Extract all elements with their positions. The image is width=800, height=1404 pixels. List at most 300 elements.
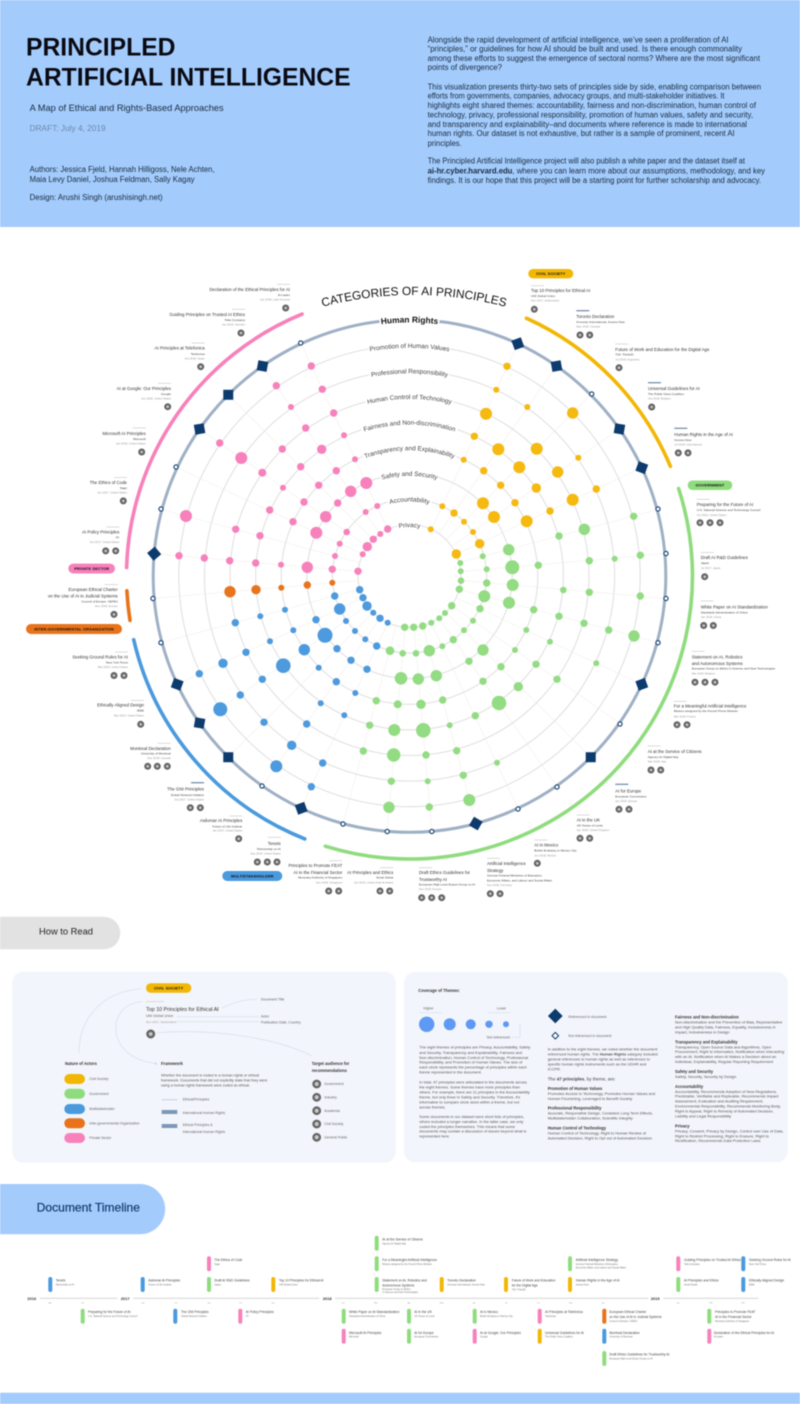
callouts: Publication Date, Country [261,1020,301,1024]
entry: Human Rights in the Age of AI [568,1277,620,1292]
actor arc: civil society [526,318,670,466]
document: Universal Guidelines for AI: Oct 2018, Belgium [648,397,672,401]
document: Guiding Principles on Trusted AI Ethics: Telia Company [225,318,245,322]
entry: AI for Europe [407,1329,439,1344]
document: AI at Google: Our Principles: Google [161,392,171,396]
document: Artificial Intelligence Strategy: Artificial Intelligence [487,861,526,866]
document: European Ethical Charter: on the Use of AI in Judicial Systems [48,594,119,598]
entry: AI at the Service of Citizens [375,1236,423,1251]
entry: Guiding Principles: Guiding Principles on Trusted AI Ethics [684,1258,741,1262]
document: AI Policy Principles [82,527,120,553]
entry: Top 10 Principles: UNI Global Union [279,1284,298,1286]
document: Statement on AI, Robotics and Autonomous Systems: Statement on AI, Robotics [692,654,743,659]
example document: CIVIL SOCIETY [154,986,184,990]
middle column text: referenced human rights. The Human Rights category included [548,1052,658,1057]
entry: AI Principles at Telefonica [538,1309,583,1324]
document: Statement on AI, Robotics and Autonomous Systems: European Group on Ethics in Science and New Technologies [692,667,776,671]
document: Future of Work and Education for the Digital Age [615,344,710,370]
document: White Paper on AI Standardization: White Paper on AI Standardization [701,604,768,609]
document: AI in the UK [577,815,610,841]
legend: framework: Ethical/Principles [183,1098,210,1102]
entry: AI in the UK: AI in the UK [414,1310,433,1314]
intro text: principles. [428,139,462,148]
callouts: Actor [261,1014,270,1018]
right column text: Procurement, Right to Information, Notification when interacting [675,1049,784,1054]
explanatory text: theme represented in the document. [419,1070,482,1075]
footer band [0,1393,800,1404]
document: Tenets: Tenets [268,841,282,846]
entry: Guiding Principles: Telia Company [684,1263,701,1266]
authors and design credit: Authors: Jessica Fjeld, Hannah Hilligoss, Nele Achten, [30,165,215,174]
document: Tenets: Partnership on AI [257,847,281,851]
document: Top 10 Principles for Ethical AI [531,286,590,312]
dots: inter-governmental [224,580,335,597]
callouts [261,998,301,1024]
ring labels [363,316,456,530]
axis: 2016 [27,1296,37,1301]
document: Top 10 Principles for Ethical AI: Dec 2017, Switzerland [531,299,559,303]
document: AI at Google: Our Principles: AI at Google: Our Principles [117,386,172,391]
document: The Ethics of Code: The Ethics of Code [90,480,128,485]
entry: The Ethics of Code: Sage [214,1263,221,1266]
document: Artificial Intelligence Strategy: German Federal Ministries of Education, [487,873,543,877]
entry: Artificial Intelligence Strategy: German Federal Ministries of Education, [576,1263,619,1266]
axis: May [440,1302,444,1304]
entry: Montreal Declaration [602,1329,640,1344]
ring labels: Promotion of Human Values [369,342,450,352]
document: Future of Work and Education for the Digital Age: Future of Work and Education for the Digital Age [615,347,710,352]
legend: framework: framework. Documents that did not explicitly state that they were [161,1077,267,1082]
entry: The GNI Principles: Global Network Initiative [181,1315,207,1318]
axis: Oct [239,1302,243,1304]
entry: Guiding Principles [676,1256,741,1271]
intro text [428,35,765,185]
entry: Universal Guidelines for AI: The Public Voice Coalition [545,1335,573,1338]
legend: target audience: Civil Society [324,1122,344,1126]
right column text: with an AI, Notification when AI Makes a Decision about an [675,1054,776,1059]
explanatory text: informative to compare circle sizes within a theme, but not [419,1099,520,1104]
human rights ring [153,320,666,832]
axis: Sep [48,1302,53,1304]
document: AI Principles at Telefonica: Oct 2018, Spain [185,356,205,360]
document: AI Principles at Telefonica: AI Principles at Telefonica [154,346,205,350]
entry: Statement on AI: Autonomous Systems [382,1284,415,1288]
legend: nature of actors: Nature of Actors [65,1061,98,1066]
document: AI for Europe [615,784,647,812]
entry: Universal Guidelines for AI [538,1329,584,1344]
subtitle: A Map of Ethical and Rights-Based Approaches [30,102,224,113]
entry: European Ethical Charter: Council of Europe: CEPEJ [609,1320,638,1323]
legend: framework [155,1061,267,1134]
middle column text: Human Flourishing, Leveraged to Benefit Society [548,1096,632,1101]
document: AI in Mexico: AI in Mexico [534,842,559,848]
middle column text: Human Control of Technology [548,1126,607,1131]
axis: 2019 [651,1296,660,1301]
document: Principles to Promote FEAT AI in the Financial Sector: Monetary Authority of Singapore [298,876,343,880]
document: The Ethics of Code: Sage [120,486,127,490]
document: Guiding Principles on Trusted AI Ethics: Jan 2019, Sweden [222,323,245,327]
right column text: Assessment, Evaluation and Auditing Requirement, [675,1099,763,1104]
heading: How to Read [0,917,120,949]
document: Asilomar AI Principles: Future of Life Institute [212,824,243,828]
document: European Ethical Charter: European Ethical Charter [68,587,118,592]
document: For a Meaningful Artificial Intelligence: Mission assigned by the French Prime Minister [674,709,738,713]
document: Draft Ethics Guidelines for Trustworthy AI: Draft Ethics Guidelines for [419,870,471,875]
example document: Dec 2017, Switzerland [146,1020,176,1024]
entry: AI Principles at Telefonica: Telefonica [545,1315,556,1318]
intro text: This visualization presents thirty-two sets of principles side by side, enabling comparison between [428,82,761,91]
document: AI for Europe: AI for Europe [615,788,642,794]
axis [27,1296,758,1304]
entry: Artificial Intelligence Strategy [568,1256,627,1271]
entry: Declaration of the Ethical Principles: Declaration of the Ethical Principles for AI [714,1331,774,1335]
axis: Dec [272,1302,275,1304]
entry: The Ethics of Code [207,1256,243,1271]
right column text: Right to Appeal, Right to Remedy of Automated Decision, [675,1109,774,1114]
document: Asilomar AI Principles: Asilomar AI Principles [200,818,243,823]
entry: AI at the Service of Citizens: AI at the Service of Citizens [382,1238,423,1242]
document: Guiding Principles on Trusted AI Ethics: Guiding Principles on Trusted AI Ethics [169,312,246,317]
document: Preparing for the Future of AI: U.S. National Science and Technology Council [697,508,761,512]
document: Future of Work and Education for the Digital Age: Jul 2018, Argentina [615,358,640,362]
legend: framework: Framework [161,1061,184,1066]
panel: coverage of themes [404,972,788,1162]
entry: Montreal Declaration: University of Montreal [609,1335,633,1338]
radial chart: categories of AI principles [25,268,776,902]
entry: AI for Europe: European Commission [414,1335,439,1338]
document: AI in the UK: UK House of Lords [577,824,603,828]
human rights key [548,1009,612,1039]
document: Ethically Aligned Design: Mar 2019, United States [114,714,145,718]
entry: Universal Guidelines for AI: Universal Guidelines for AI [545,1331,584,1335]
document: AI at the Service of Citizens: Agency for Digital Italy [648,755,679,759]
pill: multistakeholder [222,871,282,881]
document: Artificial Intelligence Strategy: Strategy [487,868,504,873]
entry: Asilomar AI Principles: Asilomar AI Principles [148,1278,181,1282]
entry: Principles to Promote FEAT AI: Monetary Authority of Singapore [715,1320,750,1323]
intro text: among these efforts to suggest the emergence of sectoral norms? Where are the most significant [428,54,761,63]
document: Future of Work and Education for the Digital Age: T20: Think20 [615,353,634,357]
axis: Mar [374,1302,378,1304]
document: Draft Ethics Guidelines for Trustworthy AI: Dec 2018, Europe [419,887,442,891]
document: Preparing for the Future of AI: Preparing for the Future of AI [697,502,753,507]
document: Declaration of the Ethical Principles for AI: Apr 2018, Latin America [260,298,290,302]
right column text [675,1015,784,1143]
explanatory text: theme, but only three in Safety and Security. Therefore, it's [419,1094,520,1099]
intro text: findings. It is our hope that this project will be a starting point for further scholarship and advocacy. [428,176,761,185]
document: The GNI Principles: The GNI Principles [167,786,205,792]
entry: Principles to Promote FEAT AI: AI in the Financial Sector [715,1315,753,1319]
right column text: Safety, Security, Security by Design [675,1074,736,1079]
entry: Ethically Aligned Design: IEEE [749,1284,755,1286]
document: Declaration of the Ethical Principles for AI [209,284,290,310]
entry: Preparing for the Future of AI: U.S. National Science and Technology Council [88,1315,138,1318]
legend: target audience: General Public [324,1136,348,1140]
intro text: The Principled Artificial Intelligence project will also publish a white paper and the dataset itself at [428,157,746,166]
axis: 2017 [121,1296,130,1301]
axis: Jan [677,1302,680,1304]
actor arc: government [325,488,692,859]
document: AI Principles at Telefonica: Telefonica [191,352,205,356]
document: Draft AI R&D Guidelines: Draft AI R&D Guidelines [701,555,749,560]
timeline [27,1236,791,1366]
document: Artificial Intelligence Strategy: Nov 2018, Germany [487,883,513,887]
entry: For a Meaningful AI: For a Meaningful Artificial Intelligence [382,1258,437,1262]
document: Draft AI R&D Guidelines: Japan [701,561,709,565]
entry: Statement on AI: European Group on Ethics [382,1288,411,1291]
document: AI Policy Principles: ITI [116,535,119,539]
document: Ethically Aligned Design: Ethically Aligned Design [97,703,145,708]
entry: Tenets: Tenets [56,1278,66,1282]
right column text: Transparency and Explainability [675,1039,738,1044]
heading: Document Timeline: Document Timeline [37,1201,140,1215]
document: AI Principles and Ethics [347,868,394,893]
entry: Statement on AI: Statement on AI, Robotics and [382,1278,427,1282]
entry: Draft Ethics Guidelines: Draft Ethics Guidelines for Trustworthy AI [609,1352,669,1356]
explanatory text [419,1045,530,1139]
axis: Jan [342,1302,345,1304]
document: Draft Ethics Guidelines for Trustworthy AI: Trustworthy AI [419,877,447,882]
ring labels: Safety and Security [381,470,438,481]
authors and design credit: Maia Levy Daniel, Joshua Feldman, Sally Kagay [30,175,195,184]
intro text: highlights eight shared themes: accountability, fairness and non-discrimination, human control of [428,101,757,110]
entry: Future of Work [504,1277,556,1292]
entry: For a Meaningful AI [375,1256,437,1271]
document: AI for Europe: European Commission [615,795,647,799]
entry: Top 10 Principles: Top 10 Principles for Ethical AI [279,1278,324,1282]
pill: inter-governmental organization: INTER-GOVERNMENTAL ORGANIZATION [34,626,114,631]
legend: target audience: recommendations [312,1068,348,1073]
explanatory text: coded the principles themselves. This means that some [419,1124,515,1129]
entry: Statement on AI: in Science and New Technologies [382,1291,419,1294]
legend: framework: International Human Rights [183,1111,225,1115]
right column text: Environmental Responsibility, Recommends Monitoring Body, [675,1104,781,1109]
middle column text: Promotion of Human Values [548,1086,603,1091]
pill: multistakeholder: MULTISTAKEHOLDER [231,873,274,878]
middle column text: specific human rights instruments such as the UDHR and [548,1062,646,1067]
entry: AI in Mexico [473,1309,513,1324]
document: The GNI Principles: Oct 2017, United States [174,798,205,802]
document: Artificial Intelligence Strategy [487,858,553,896]
document: AI Principles at Telefonica [154,343,205,369]
draft date: DRAFT: July 4, 2019 [30,123,106,133]
legend: framework: using a human rights framework were coded as ethical. [161,1082,250,1087]
document: Montreal Declaration: Montreal Declaration [130,746,171,751]
example document: UNI Global Union [146,1014,173,1018]
right column text: Privacy [675,1123,690,1128]
intro text: Alongside the rapid development of artificial intelligence, we’ve seen a proliferation of AI [428,35,729,44]
document: Preparing for the Future of AI [697,499,761,525]
entry: Asilomar AI Principles: Future of Life Institute [148,1284,172,1286]
pill: government: GOVERNMENT [696,483,725,488]
document: AI at Google: Our Principles: Jun 2018, United States [141,396,172,400]
document: AI in Mexico [534,840,577,866]
document: Principles to Promote FEAT AI in the Financial Sector: Principles to Promote FEAT [288,863,343,868]
middle column text: In addition to the eight themes, we noted whether the document [548,1047,658,1052]
callouts: Document Title [261,998,284,1002]
document: AI Policy Principles: Oct 2017, United States [90,540,120,544]
entry: Draft Ethics Guidelines [602,1351,669,1366]
entry: Asilomar AI Principles [141,1277,181,1292]
document: Seeking Ground Rules for AI [72,652,129,678]
document: Toronto Declaration: Toronto Declaration [576,314,615,319]
entry: AI at Google: Google [480,1335,488,1338]
right column text: Predictable, Verifiable and Replicable, Recommends Impact [675,1094,779,1099]
authors and design credit: Design: Arushi Singh (arushisingh.net) [30,193,163,202]
explanatory text: others. For example, there are 11 principles in the Accountability [419,1089,530,1094]
entry: Future of Work: for the Digital Age [512,1284,538,1288]
circle size scale [419,1006,520,1040]
entry: Seeking Ground Rules [741,1256,791,1271]
axis: Jun [207,1302,211,1304]
ring labels: Professional Responsibility [370,368,448,378]
legend: framework: Whether the document is rooted in a human rights or ethical [161,1072,259,1077]
document: Ethically Aligned Design: IEEE [137,708,144,712]
entry: Microsoft AI Principles [342,1329,382,1344]
document: AI at Google: Our Principles [117,383,172,409]
intro text: technology, privacy, professional responsibility, promotion of human values, safety and security, [428,110,753,119]
right column text: Rectification, Recommends Data Protection Laws [675,1138,760,1143]
middle column text: Human Control of Technology, Right to Human Review of [548,1131,647,1136]
entry: European Ethical Charter [602,1309,662,1324]
explanatory text: others included a longer narrative. In the latter case, we only [419,1119,523,1124]
explanatory text: In total, 47 principles were articulated in the documents across [419,1079,527,1084]
document: Human Rights in the Age of AI: Jul 2018, International [674,442,702,446]
entry: AI in the UK [407,1309,435,1324]
entry: Future of Work: T20: Think20 [512,1288,526,1292]
document: For a Meaningful Artificial Intelligence: For a Meaningful Artificial Intelligence [674,704,747,708]
spokes [154,344,665,831]
legend: target audience: Academia [324,1109,340,1113]
document: Asilomar AI Principles: Jan 2017, United States [212,829,243,833]
document: Toronto Declaration: May 2018, Canada [576,325,600,329]
right column text: Liability and Legal Responsibility [675,1114,731,1119]
right column text: Right to Restrict Processing, Right to Erasure, Right to [675,1133,769,1138]
explanatory text: Some documents in our dataset were short lists of principles, [419,1114,524,1119]
human rights markers: referenced diamonds [147,337,648,830]
header panel [0,0,800,227]
legend: nature of actors: Multistakeholder [89,1107,116,1111]
intro text: points of divergence? [428,63,503,72]
entry: Draft AI R&D Guidelines: Japan [214,1284,221,1286]
legend: target audience: Government [324,1082,344,1086]
title: ARTIFICIAL INTELLIGENCE [26,65,351,92]
document: European Ethical Charter [48,585,119,617]
right column text: Safety and Security [675,1069,714,1074]
document: Draft AI R&D Guidelines: Jul 2017, Japan [701,566,721,570]
document: Principles to Promote FEAT AI in the Financial Sector [288,861,343,893]
ring labels: Transparency and Explainability [363,445,456,460]
entry: Human Rights in the Age of AI: Access Now [576,1284,589,1286]
entry: For a Meaningful AI: Mission assigned by the French Prime Minister [382,1263,432,1266]
dots: government [360,513,644,813]
right column text: Non-discrimination and the Prevention of Bias, Representative [675,1020,782,1025]
heading: Document Timeline [0,1184,165,1234]
document: Tenets [250,837,282,864]
document: AI Principles and Ethics: AI Principles and Ethics [347,870,394,875]
right column text: Transparency, Open Source Data and Algorithms, Open [675,1044,771,1049]
entry: Seeking Ground Rules: Seeking Ground Rules for AI [749,1258,791,1262]
document: Preparing for the Future of AI: Oct 2016, United States [697,513,727,517]
entry: AI Principles and Ethics: AI Principles and Ethics [684,1278,719,1282]
entry: Toronto Declaration [440,1277,485,1292]
axis: Oct [174,1302,178,1304]
entry: Toronto Declaration: Toronto Declaration [447,1278,476,1282]
document: For a Meaningful Artificial Intelligence [674,701,747,727]
document: Seeking Ground Rules for AI: Mar 2019, United States [98,665,129,669]
example document [146,983,219,1037]
legend: target audience [312,1061,350,1141]
right column text: and High Quality Data, Fairness, Equality, Inclusiveness in [675,1025,775,1030]
entry: Draft AI R&D Guidelines: Draft AI R&D Guidelines [214,1278,250,1282]
document: Top 10 Principles for Ethical AI: UNI Global Union [531,294,555,298]
document: The GNI Principles [167,783,205,810]
document: White Paper on AI Standardization: Jan 2018, China [701,615,722,619]
ring labels: Accountability [389,496,430,506]
intro text: human rights. Our dataset is not exhaustive, but rather is a sample of prominent, recent AI [428,129,735,138]
document: Microsoft AI Principles: Microsoft [133,437,146,441]
entry: Tenets [48,1277,74,1292]
middle column text: general references to human rights as well as references to [548,1057,650,1062]
circle size scale: Not referenced [487,1036,510,1040]
pill: private sector: PRIVATE SECTOR [74,566,109,571]
document: Top 10 Principles for Ethical AI: Top 10 Principles for Ethical AI [531,288,590,293]
pill: government [688,480,732,490]
entry: Human Rights in the Age of AI: Human Rights in the Age of AI [576,1278,620,1282]
entry: AI Principles and Ethics [676,1277,719,1292]
axis: Nov [569,1302,572,1304]
document: AI in Mexico: Jun 2018, Mexico [534,853,557,857]
entry: AI at the Service of Citizens: Agency for Digital Italy [382,1242,407,1246]
document: Statement on AI, Robotics and Autonomous Systems [692,651,776,685]
explanatory text: and Security, Transparency and Explainability, Fairness and [419,1050,522,1055]
intro text: and transparency and explainability–and documents where reference is made to international [428,120,747,129]
document: European Ethical Charter: Council of Europe: CEPEJ [81,599,118,603]
middle column text: Accurate, Responsible Design, Considers Long Term Effects, [548,1111,653,1116]
circle size scale: Lower [497,1006,507,1010]
human rights key: Referenced in document [568,1015,606,1019]
document: Human Rights in the Age of AI: Access Now [674,438,692,442]
entry: AI Policy Principles [238,1309,274,1324]
entry: Top 10 Principles [271,1277,324,1292]
entry: Ethically Aligned Design: Ethically Aligned Design [749,1278,784,1282]
document: AI Principles and Ethics: Jan 2019, United Arab Emirates [354,880,394,884]
document: Montreal Declaration [130,743,171,769]
title: PRINCIPLED [26,35,176,62]
document: For a Meaningful Artificial Intelligence: Mar 2018, France [674,714,696,718]
chart title: CATEGORIES OF AI PRINCIPLES [321,286,507,307]
document: Human Rights in the Age of AI [674,428,733,455]
document: AI in the UK: Apr 2018, United Kingdom [577,828,610,832]
middle column text [548,1047,658,1141]
document: Tenets: Sep 2016, United States [250,852,281,856]
legend: nature of actors: Civil Society [89,1077,109,1081]
axis: Oct [537,1302,540,1304]
middle column text: The 47 principles, by theme, are: [548,1076,615,1081]
entry: Artificial Intelligence Strategy: Artificial Intelligence Strategy [576,1258,618,1262]
right column text: Accountability, Recommends Adoption of New Regulations, [675,1089,777,1094]
axis: Oct [81,1302,85,1304]
middle column text: Automated Decision, Right to Opt out of Automated Decision [548,1136,652,1141]
document: Principles to Promote FEAT AI in the Financial Sector: Nov 2018, Singapore [316,880,343,884]
entry: Montreal Declaration: Montreal Declaration [609,1331,640,1335]
document: Toronto Declaration [576,311,626,337]
entry: European Ethical Charter: European Ethical Charter [609,1310,647,1314]
document: Draft Ethics Guidelines for Trustworthy AI [419,868,475,900]
entry: Principles to Promote FEAT AI [707,1309,755,1324]
entry: AI at Google [473,1329,521,1344]
entry: AI Policy Principles: ITI [246,1315,249,1318]
